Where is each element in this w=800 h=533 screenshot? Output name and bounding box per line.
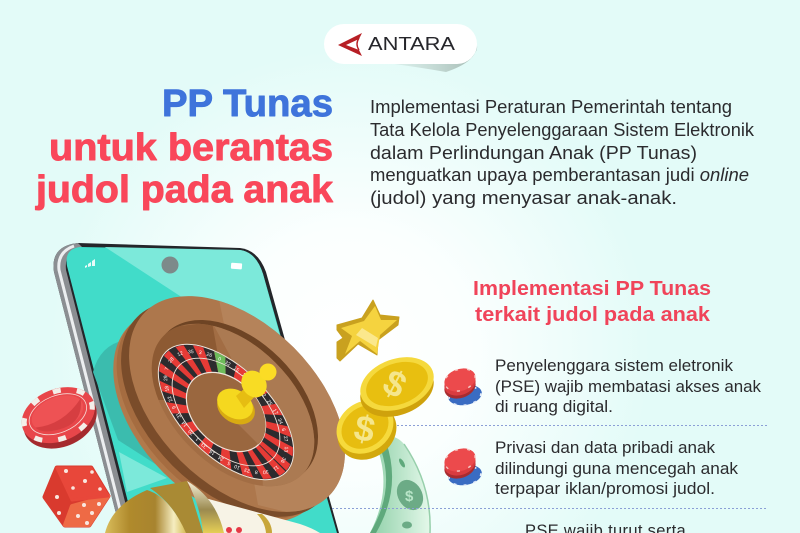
section heading: Implementasi PP Tunas bbox=[473, 278, 711, 300]
inner wheel hub bbox=[171, 357, 281, 467]
intro text block: menguatkan upaya pemberantasan judi online bbox=[370, 165, 749, 185]
roulette spinner bbox=[211, 364, 276, 431]
poker chip bbox=[13, 377, 105, 459]
section heading: terkait judol pada anak bbox=[475, 304, 711, 326]
number ring bbox=[135, 321, 317, 503]
title: untuk berantas bbox=[49, 127, 333, 169]
money note bbox=[370, 436, 430, 533]
icon: chip stack 2 bbox=[441, 445, 483, 488]
icon: phone battery bbox=[231, 263, 242, 269]
section heading bbox=[473, 278, 711, 326]
list item 1: di ruang digital. bbox=[495, 398, 613, 416]
list item 2: dilindungi guna mencegah anak bbox=[495, 460, 739, 478]
intro text block: Implementasi Peraturan Pemerintah tentang bbox=[370, 97, 732, 117]
icon: phone camera bbox=[162, 256, 178, 274]
money note: $ bbox=[405, 488, 414, 505]
dice bbox=[45, 468, 108, 525]
list item 2: Privasi dan data pribadi anak bbox=[495, 439, 716, 457]
intro text block: (judol) yang menyasar anak-anak. bbox=[370, 188, 677, 208]
list item 1 bbox=[495, 357, 762, 416]
intro text block: Tata Kelola Penyelenggaraan Sistem Elektronik bbox=[370, 120, 755, 140]
logo: ANTARA pill: ANTARA bbox=[368, 33, 456, 54]
logo: ANTARA pill bbox=[324, 24, 477, 72]
icon: phone signal bbox=[85, 259, 95, 268]
coins: $ bbox=[377, 361, 413, 406]
roulette wheel: 0 32 15 19 4 21 2 25 17 34 6 27 13 36 11 30 8 23 10 5 24 16 33 1 20 14 31 9 22 18 29 7 28 12 35 3 26 bbox=[164, 350, 288, 474]
coins: $ bbox=[351, 406, 379, 451]
icon: chip stack 1 bbox=[441, 365, 483, 408]
star bbox=[337, 300, 399, 361]
title: PP Tunas bbox=[162, 83, 333, 125]
list item 2 bbox=[495, 439, 739, 498]
title bbox=[35, 83, 334, 211]
list item 2: terpapar iklan/promosi judol. bbox=[495, 480, 715, 498]
roulette wheel bbox=[113, 296, 345, 520]
title: judol pada anak bbox=[35, 169, 334, 211]
phone illustration bbox=[54, 243, 339, 533]
coins bbox=[326, 348, 441, 471]
list item 1: Penyelenggara sistem eletronik bbox=[495, 357, 734, 375]
intro text block: dalam Perlindungan Anak (PP Tunas) bbox=[370, 143, 697, 163]
intro text block bbox=[370, 97, 755, 208]
list item 1: (PSE) wajib membatasi akses anak bbox=[495, 378, 762, 396]
slot machine base bbox=[105, 481, 320, 533]
